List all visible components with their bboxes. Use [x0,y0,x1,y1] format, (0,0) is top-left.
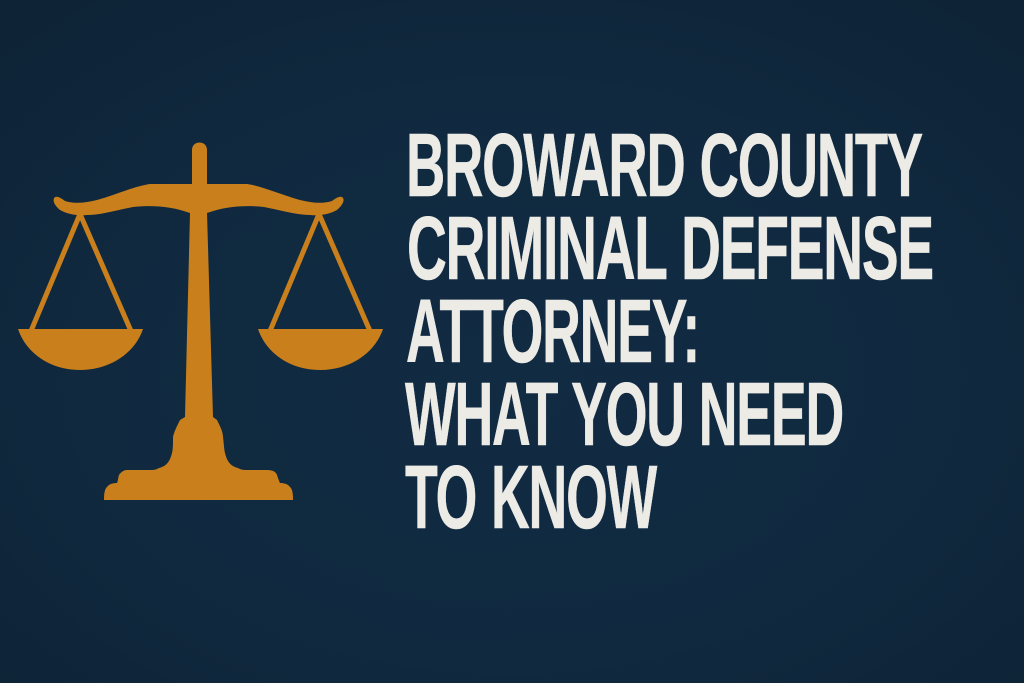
title line 3: ATTORNEY: [406,282,699,382]
icon: scales of justice [18,142,383,500]
right scale ropes [270,214,370,331]
right pan [258,329,383,370]
left scale ropes [31,214,131,331]
title [405,116,933,548]
title line 5: TO KNOW [405,448,657,548]
left pan [18,329,143,370]
stand with beam and base [54,142,344,500]
